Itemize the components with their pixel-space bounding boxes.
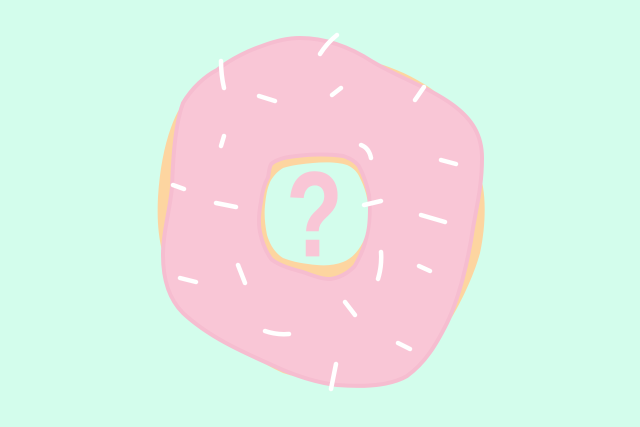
sprinkle 18 bbox=[265, 331, 289, 334]
question mark: ? bbox=[286, 147, 343, 282]
sprinkle 6 bbox=[320, 35, 337, 54]
sprinkle 11 bbox=[364, 201, 381, 205]
hole: donut inner edge bbox=[261, 156, 368, 277]
sprinkles bbox=[173, 35, 456, 389]
frosting bbox=[163, 38, 482, 386]
sprinkle 3 bbox=[221, 136, 224, 146]
sprinkle 10 bbox=[441, 160, 456, 164]
sprinkle 2 bbox=[259, 96, 275, 101]
sprinkle 5 bbox=[216, 203, 236, 207]
donut base bbox=[158, 57, 485, 382]
sprinkle 20 bbox=[180, 278, 196, 282]
sprinkle 17 bbox=[331, 364, 336, 389]
sprinkle 12 bbox=[421, 215, 445, 222]
hole: background showing through bbox=[265, 162, 368, 265]
sprinkle 4 bbox=[173, 185, 184, 189]
sprinkle 8 bbox=[415, 87, 424, 100]
sprinkle 16 bbox=[398, 343, 410, 349]
sprinkle 13 bbox=[419, 266, 430, 271]
sprinkle 1 bbox=[221, 61, 224, 88]
sprinkle 9 bbox=[361, 145, 371, 158]
hole: frosting halo bbox=[261, 156, 368, 277]
sprinkle 15 bbox=[345, 302, 355, 315]
sprinkle 7 bbox=[332, 88, 341, 95]
sprinkle 14 bbox=[378, 252, 381, 279]
sprinkle 19 bbox=[238, 265, 245, 283]
